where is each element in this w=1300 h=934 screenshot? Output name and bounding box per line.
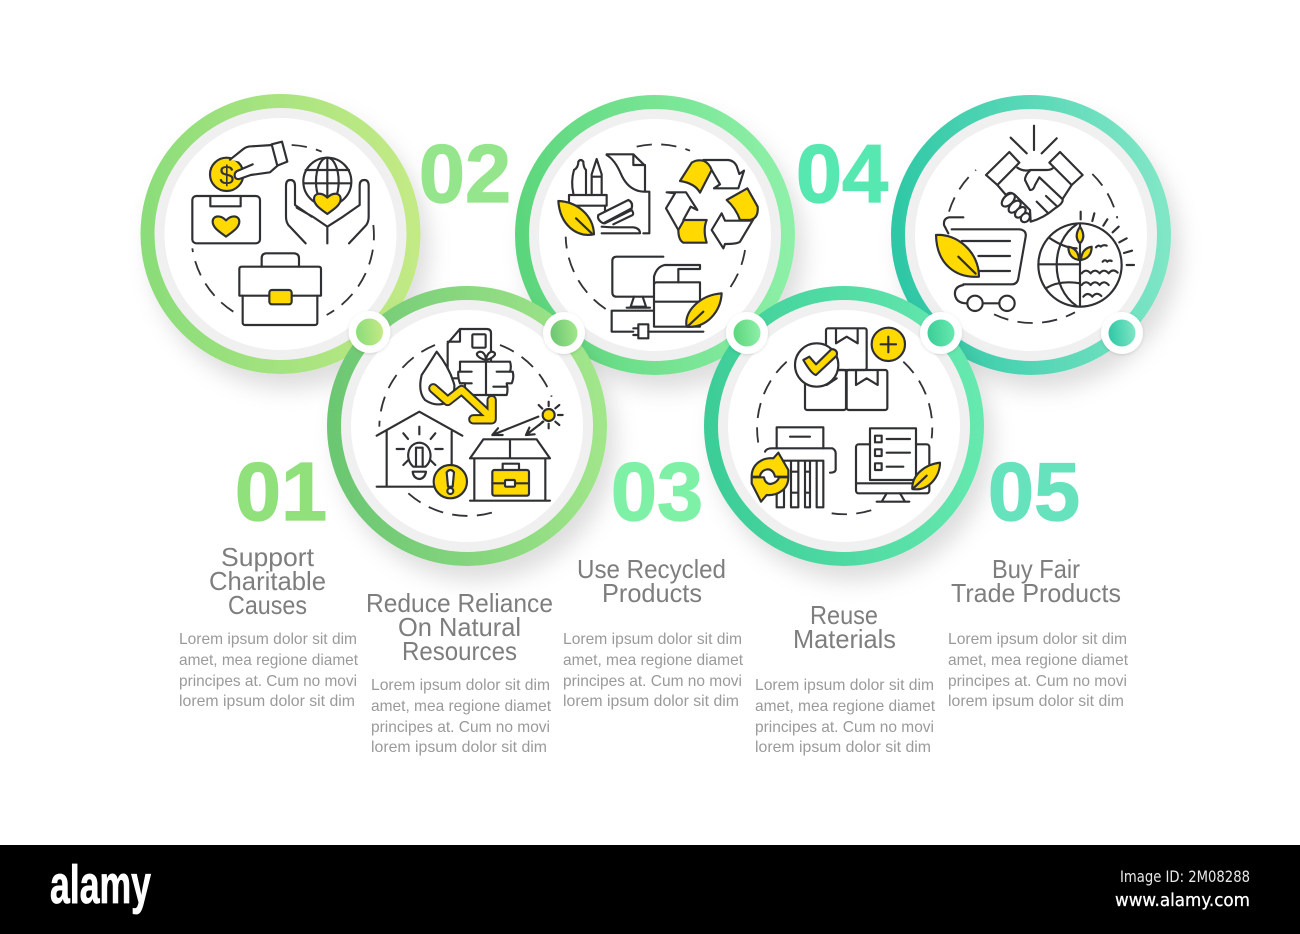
connector dot 4 bbox=[920, 312, 962, 354]
icon: recycling arrows bbox=[666, 160, 758, 248]
body text 3: Lorem ipsum dolor sit dim bbox=[563, 631, 742, 648]
body text 3: amet, mea regione diamet bbox=[563, 652, 744, 669]
heading: Support Charitable Causes: Causes bbox=[228, 590, 307, 620]
circle 3 ring bbox=[522, 102, 788, 368]
body text 3: principes at. Cum no movi bbox=[563, 673, 742, 690]
body text 4: lorem ipsum dolor sit dim bbox=[755, 739, 931, 756]
heading: Buy Fair Trade Products: Buy Fair bbox=[992, 554, 1080, 584]
footer image id: Image ID: 2M08288 bbox=[1120, 867, 1250, 886]
icon group 1: charity bbox=[192, 142, 374, 325]
icon: globe with sprout and waves bbox=[1038, 212, 1134, 307]
heading: Support Charitable Causes bbox=[209, 542, 326, 620]
icon group 2: reduce reliance bbox=[377, 345, 563, 516]
icon: plus badge bbox=[872, 328, 905, 361]
icon group 5: fair trade bbox=[936, 170, 1134, 323]
heading: Reuse Materials: Reuse bbox=[810, 600, 878, 630]
circle 2 ring bbox=[334, 293, 600, 559]
heading: Reuse Materials bbox=[793, 600, 896, 654]
connector dot 3 bbox=[726, 312, 768, 354]
heading: Reduce Reliance On Natural Resources bbox=[366, 588, 553, 666]
heading: Reuse Materials: Materials bbox=[793, 624, 896, 654]
icon: office supplies bbox=[558, 154, 649, 235]
circle 4 ring bbox=[711, 293, 977, 559]
heading: Reduce Reliance On Natural Resources: Resources bbox=[402, 636, 517, 666]
body text 5 bbox=[948, 631, 1129, 710]
icon: handshake bbox=[986, 126, 1083, 224]
icon group 4: reuse materials bbox=[757, 328, 940, 514]
icon: shopping cart with leaf bbox=[936, 217, 1026, 311]
icon group 2b: document, drop, gift and arrow bbox=[420, 329, 513, 419]
body text 2: Lorem ipsum dolor sit dim bbox=[371, 677, 550, 694]
connector dot 2 bbox=[543, 312, 585, 354]
body text 1: amet, mea regione diamet bbox=[179, 652, 359, 669]
footer url: www.alamy.com bbox=[1115, 890, 1250, 911]
heading: Use Recycled Products: Products bbox=[602, 578, 702, 608]
body text 1: principes at. Cum no movi bbox=[179, 673, 357, 690]
circle 1 ring bbox=[148, 101, 414, 367]
body text 2: principes at. Cum no movi bbox=[371, 719, 550, 736]
number 04: 04 bbox=[796, 127, 888, 220]
icon: briefcase bbox=[239, 253, 321, 325]
icon: sun with arrows bbox=[492, 402, 563, 435]
icon: declining arrow bbox=[433, 388, 492, 419]
connector dot 1 bbox=[348, 311, 390, 353]
icon: monitor with checklist bbox=[856, 428, 940, 502]
circle 5 ring bbox=[898, 102, 1164, 368]
body text 5: principes at. Cum no movi bbox=[948, 673, 1127, 690]
icon: open box with briefcase bbox=[470, 439, 550, 501]
body text 2: lorem ipsum dolor sit dim bbox=[371, 739, 547, 756]
footer bar bbox=[0, 845, 1300, 934]
icon: checkmark badge bbox=[795, 343, 838, 387]
number 01: 01 bbox=[235, 445, 327, 538]
number 03: 03 bbox=[611, 445, 703, 538]
heading: Reduce Reliance On Natural Resources: Reduce Reliance bbox=[366, 588, 553, 618]
body text 1 bbox=[179, 631, 359, 710]
body text 4: amet, mea regione diamet bbox=[755, 698, 936, 715]
body text 4: principes at. Cum no movi bbox=[755, 719, 934, 736]
icon: computer and printer bbox=[612, 257, 722, 338]
icon: donation box with heart bbox=[192, 196, 260, 243]
body text 5: amet, mea regione diamet bbox=[948, 652, 1129, 669]
heading: Support Charitable Causes: Charitable bbox=[209, 566, 326, 596]
body text 1: lorem ipsum dolor sit dim bbox=[179, 693, 355, 710]
body text 5: lorem ipsum dolor sit dim bbox=[948, 693, 1124, 710]
heading: Use Recycled Products: Use Recycled bbox=[577, 554, 726, 584]
body text 4: Lorem ipsum dolor sit dim bbox=[755, 677, 934, 694]
icon: house with bulb bbox=[377, 412, 467, 498]
body text 1: Lorem ipsum dolor sit dim bbox=[179, 631, 357, 648]
body text 3: lorem ipsum dolor sit dim bbox=[563, 693, 739, 710]
footer logo: alamy bbox=[50, 855, 151, 915]
icon: shredder with sync arrows bbox=[752, 427, 836, 507]
number 02: 02 bbox=[419, 127, 511, 220]
icon group 3: recycled products bbox=[566, 144, 745, 338]
icon: fuel drop bbox=[420, 352, 454, 404]
body text 4 bbox=[755, 677, 936, 756]
icon: gift stack bbox=[458, 352, 513, 395]
connector dot 5 bbox=[1101, 312, 1143, 354]
heading: Use Recycled Products bbox=[577, 554, 726, 608]
icon: stacked boxes bbox=[805, 328, 887, 410]
icon: hand dropping coin bbox=[210, 142, 287, 191]
heading: Reduce Reliance On Natural Resources: On Natural bbox=[398, 612, 521, 642]
heading: Buy Fair Trade Products bbox=[951, 554, 1121, 608]
icon: hands holding globe and heart bbox=[286, 158, 369, 243]
icon: document bbox=[448, 329, 491, 378]
body text 5: Lorem ipsum dolor sit dim bbox=[948, 631, 1127, 648]
number 05: 05 bbox=[988, 445, 1080, 538]
body text 3 bbox=[563, 631, 744, 710]
icon: hand dropping coin: $ bbox=[219, 160, 234, 190]
heading: Support Charitable Causes: Support bbox=[221, 542, 315, 572]
body text 2: amet, mea regione diamet bbox=[371, 698, 552, 715]
body text 2 bbox=[371, 677, 552, 756]
heading: Buy Fair Trade Products: Trade Products bbox=[951, 578, 1121, 608]
